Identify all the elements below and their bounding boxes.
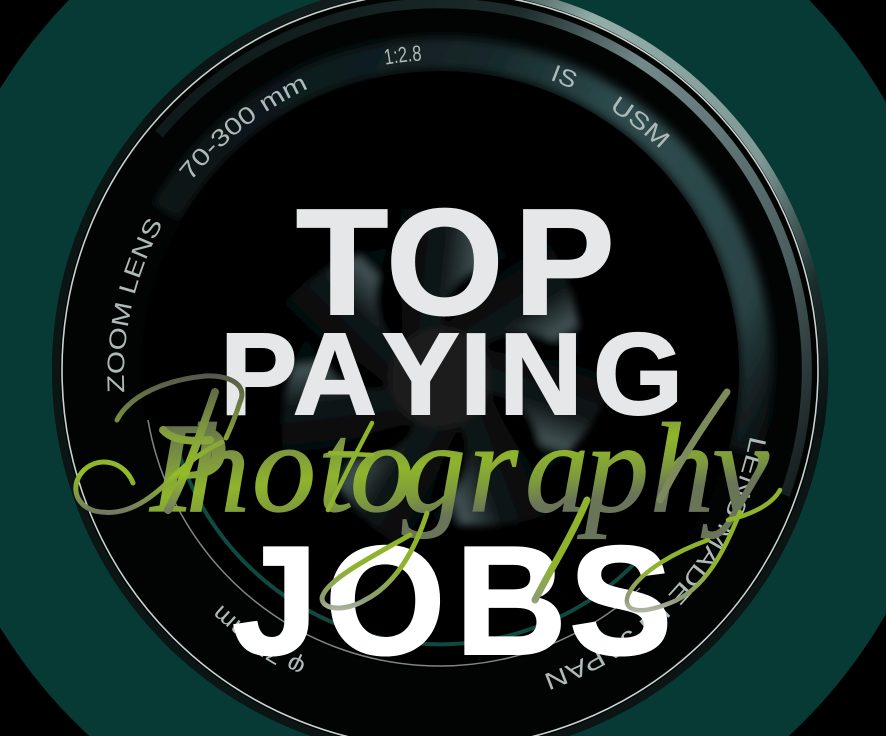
label: zoom lens: ZOOM LENS (107, 219, 160, 392)
P upper swash (117, 376, 242, 438)
g descender (322, 513, 427, 608)
lens teal glow band (166, 53, 756, 452)
label: USM: USM (613, 96, 670, 148)
lens middle band (159, 3, 807, 495)
p descender (535, 500, 587, 600)
P lower swash (76, 442, 222, 513)
aperture blades (247, 171, 650, 581)
headline: paying: PAYING (220, 309, 683, 439)
t ascender (328, 423, 372, 510)
label: lens made in Japan: LENS MADE IN JAPAN (545, 438, 766, 690)
lens engraved labels (107, 46, 766, 690)
label: filter diameter: φ 77 mm (215, 605, 304, 672)
lens outer band (146, 0, 824, 437)
lens inner rings (148, 420, 640, 666)
lens inner disc (141, 71, 739, 669)
headline: jobs: JOBS (232, 514, 672, 687)
label: IS: IS (552, 65, 576, 87)
label: focal length: 70-300 mm (178, 78, 307, 178)
headline: top: TOP (296, 177, 615, 346)
script word: photography (76, 376, 780, 610)
P stem (163, 392, 215, 510)
y descender (627, 490, 780, 610)
script letters: Photography (149, 397, 769, 539)
label: aperture: 1:2.8 (384, 46, 421, 64)
h ascender (660, 392, 727, 500)
